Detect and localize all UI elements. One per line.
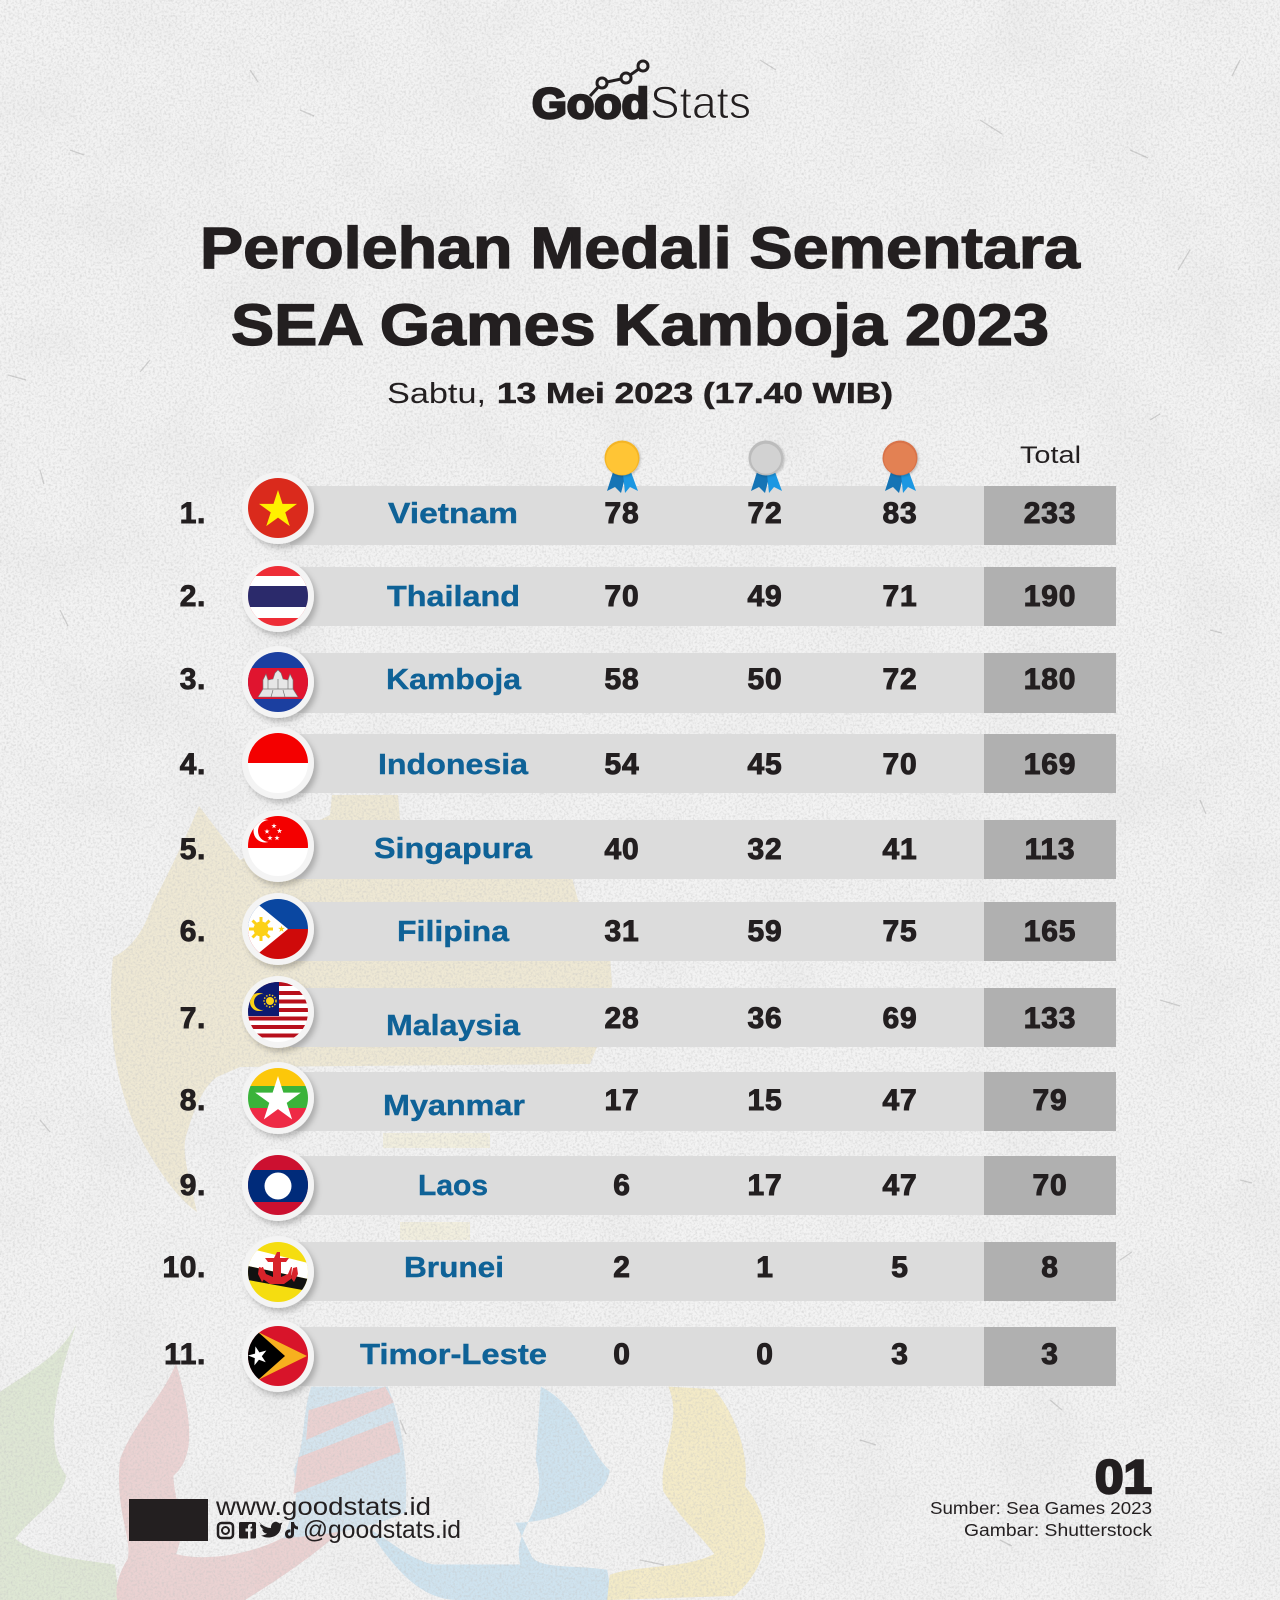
row 2: Thailand: 49 — [748, 580, 782, 613]
row 11: Timor-Leste: Timor-Leste — [360, 1339, 547, 1371]
row 5: Singapura: 41 — [883, 833, 917, 866]
column header: Total: Total — [1020, 442, 1081, 469]
row 8: Myanmar: 47 — [883, 1084, 917, 1117]
subtitle: date: 13 Mei 2023 (17.40 WIB) — [497, 378, 893, 410]
flag: Thailand — [242, 560, 314, 632]
logo: GoodStats: Good — [532, 80, 649, 128]
row 8: Myanmar: 15 — [748, 1084, 782, 1117]
row 10: Brunei: Brunei — [404, 1252, 504, 1284]
row 10: Brunei: 5 — [891, 1251, 909, 1284]
footer: website and social handles — [129, 1493, 461, 1544]
icon: bronze medal — [882, 440, 918, 493]
row 2: Thailand: 70 — [605, 580, 639, 613]
row 1: Vietnam: 72 — [748, 497, 782, 530]
row 11: Timor-Leste: 3 — [891, 1338, 909, 1371]
flag: Cambodia — [242, 646, 314, 718]
row 9: Laos: 70 — [1033, 1169, 1067, 1202]
logo: GoodStats: Stats — [650, 77, 751, 128]
row 7: Malaysia — [180, 976, 1116, 1048]
row 5: Singapura: 40 — [605, 833, 639, 866]
row 9: Laos: Laos — [418, 1170, 488, 1202]
row 3: Kamboja: Kamboja — [386, 664, 522, 696]
row 6: Filipina: 75 — [883, 915, 917, 948]
source credits — [930, 1498, 1152, 1540]
row 7: Malaysia: Malaysia — [386, 1010, 521, 1042]
row 9: Laos: 9. — [180, 1169, 206, 1202]
flag: Malaysia — [242, 976, 314, 1048]
row 4: Indonesia: 169 — [1024, 748, 1076, 781]
row 9: Laos: 47 — [883, 1169, 917, 1202]
title: SEA Games Kamboja 2023 — [231, 293, 1049, 358]
row 4: Indonesia: 4. — [180, 748, 206, 781]
subtitle: date — [387, 378, 893, 410]
row 4: Indonesia — [180, 727, 1116, 799]
source credits: Sumber: Sea Games 2023 — [930, 1498, 1152, 1518]
row 4: Indonesia: 54 — [605, 748, 639, 781]
row 8: Myanmar: 79 — [1033, 1084, 1067, 1117]
title — [200, 216, 1080, 358]
row 4: Indonesia: 70 — [883, 748, 917, 781]
row 1: Vietnam: 1. — [180, 497, 206, 530]
row 8: Myanmar: Myanmar — [383, 1090, 525, 1122]
row 3: Kamboja: 72 — [883, 663, 917, 696]
row 6: Filipina: Filipina — [397, 916, 510, 948]
row 2: Thailand — [180, 560, 1116, 632]
source credits: Gambar: Shutterstock — [964, 1520, 1152, 1540]
row 7: Malaysia: 7. — [180, 1002, 206, 1035]
row 3: Kamboja: 180 — [1024, 663, 1076, 696]
subtitle: date: Sabtu, — [387, 378, 486, 410]
row 5: Singapura: Singapura — [374, 833, 533, 865]
row 1: Vietnam: Vietnam — [388, 498, 518, 530]
icon: silver medal — [748, 440, 784, 493]
row 5: Singapura: 113 — [1025, 833, 1075, 866]
medal icons header — [604, 440, 918, 493]
row 6: Filipina — [180, 893, 1116, 965]
row 10: Brunei: 10. — [162, 1251, 206, 1284]
title: Perolehan Medali Sementara — [200, 216, 1080, 281]
table rows — [162, 472, 1116, 1392]
row 7: Malaysia: 133 — [1024, 1002, 1076, 1035]
row 5: Singapura: 5. — [180, 833, 206, 866]
icon: gold medal — [604, 440, 640, 493]
row 11: Timor-Leste: 11. — [164, 1338, 206, 1371]
row 6: Filipina: 31 — [605, 915, 639, 948]
row 4: Indonesia: Indonesia — [378, 749, 529, 781]
row 10: Brunei: 2 — [613, 1251, 631, 1284]
icon: twitter — [260, 1522, 282, 1538]
row 9: Laos — [180, 1149, 1116, 1221]
flag: Vietnam — [242, 472, 314, 544]
row 10: Brunei: 8 — [1041, 1251, 1059, 1284]
row 6: Filipina: 165 — [1024, 915, 1076, 948]
flag: Philippines — [242, 893, 314, 965]
row 6: Filipina: 59 — [748, 915, 782, 948]
row 3: Kamboja: 58 — [605, 663, 639, 696]
row 7: Malaysia: 28 — [605, 1002, 639, 1035]
row 7: Malaysia: 69 — [883, 1002, 917, 1035]
row 11: Timor-Leste: 0 — [613, 1338, 631, 1371]
icon: tiktok — [285, 1522, 298, 1538]
row 3: Kamboja: 3. — [180, 663, 206, 696]
flag: Timor-Leste — [242, 1320, 314, 1392]
row 7: Malaysia: 36 — [748, 1002, 782, 1035]
row 11: Timor-Leste: 3 — [1041, 1338, 1059, 1371]
page number: 01 — [1095, 1450, 1152, 1503]
row 2: Thailand: 71 — [883, 580, 917, 613]
icon: facebook — [239, 1522, 256, 1538]
beige ornament behind the table — [111, 795, 612, 1212]
naga ornaments at the bottom — [0, 1324, 765, 1600]
row 10: Brunei: 1 — [756, 1251, 774, 1284]
row 2: Thailand: 190 — [1024, 580, 1076, 613]
row 2: Thailand: Thailand — [387, 581, 520, 613]
row 3: Kamboja: 50 — [748, 663, 782, 696]
flag: Myanmar — [242, 1062, 314, 1134]
row 5: Singapura: 32 — [748, 833, 782, 866]
flag: Indonesia — [242, 727, 314, 799]
row 10: Brunei — [162, 1236, 1116, 1308]
row 2: Thailand: 2. — [180, 580, 206, 613]
row 8: Myanmar: 17 — [605, 1084, 639, 1117]
row 11: Timor-Leste: 0 — [756, 1338, 774, 1371]
flag: Brunei — [242, 1236, 314, 1308]
row 1: Vietnam: 83 — [883, 497, 917, 530]
row 6: Filipina: 6. — [180, 915, 206, 948]
logo: GoodStats — [532, 61, 751, 128]
row 9: Laos: 17 — [748, 1169, 782, 1202]
row 11: Timor-Leste — [164, 1320, 1116, 1392]
row 1: Vietnam: 233 — [1024, 497, 1076, 530]
row 4: Indonesia: 45 — [748, 748, 782, 781]
row 3: Kamboja — [180, 646, 1116, 718]
row 1: Vietnam — [180, 472, 1116, 545]
flag: Laos — [242, 1149, 314, 1221]
icon: instagram — [218, 1523, 233, 1538]
row 8: Myanmar: 8. — [180, 1084, 206, 1117]
row 8: Myanmar — [180, 1062, 1116, 1134]
footer: website and social handles: www.goodstats.id — [215, 1493, 431, 1521]
flag: Singapore — [242, 810, 314, 882]
row 5: Singapura — [180, 810, 1116, 882]
row 1: Vietnam: 78 — [605, 497, 639, 530]
row 9: Laos: 6 — [613, 1169, 631, 1202]
footer: website and social handles: @goodstats.id — [303, 1516, 461, 1544]
